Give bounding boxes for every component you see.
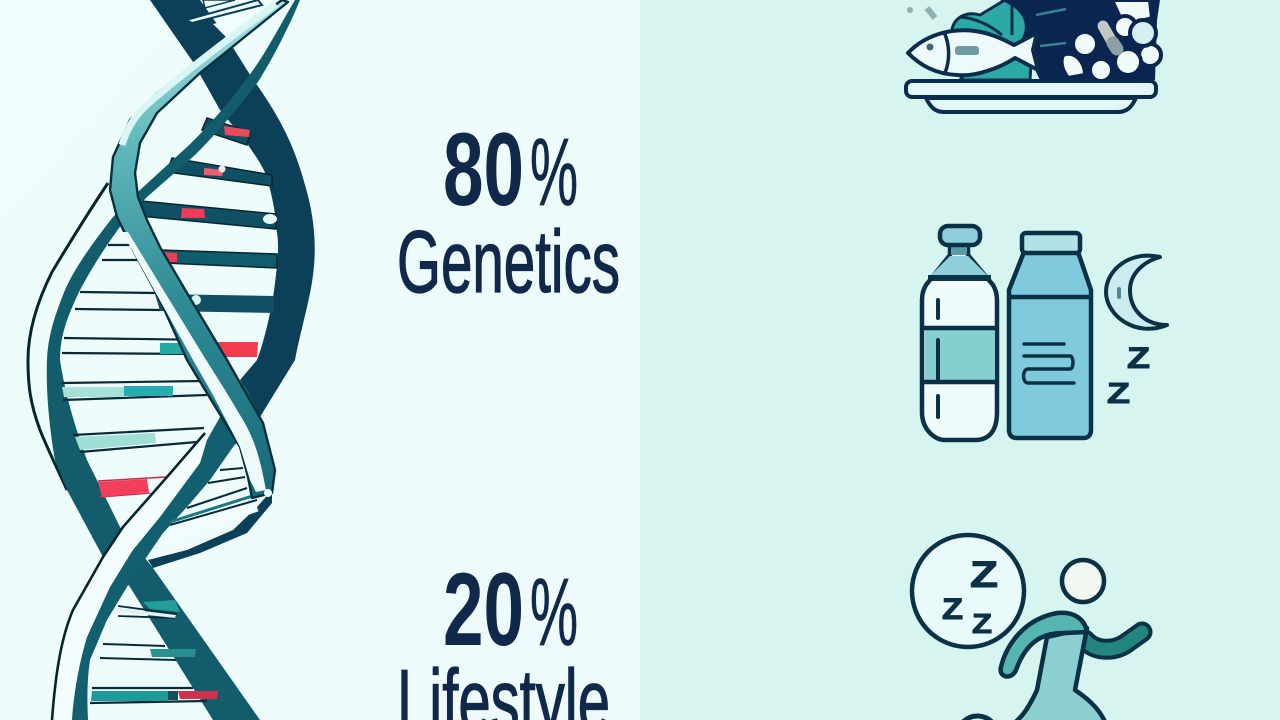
bottle — [922, 226, 997, 440]
icon: sleep bubble and runner — [912, 535, 1142, 720]
stat: 80% Genetics — [397, 112, 620, 311]
strand: front ribbon — [110, 0, 288, 498]
strand: teal left backbone with lower dark run — [47, 0, 300, 720]
label: sleep Z letters — [1107, 342, 1150, 410]
moon — [1106, 256, 1167, 329]
sleep bubble: Z — [970, 554, 998, 595]
rung set: lower — [62, 381, 257, 703]
sleep bubble: Z — [942, 593, 963, 626]
greens — [952, 0, 1035, 80]
sleep bubble — [912, 535, 1024, 647]
rung set: upper — [62, 118, 277, 357]
strand: outer left outline — [28, 183, 108, 490]
runner near arm — [1001, 613, 1087, 676]
sleep bubble: Z — [972, 608, 992, 639]
percent sign: % — [530, 559, 578, 666]
dark leaf — [1000, 0, 1160, 80]
strand: lower teal continuation — [72, 385, 260, 720]
plate — [906, 81, 1156, 97]
panel: genetics background — [0, 0, 640, 720]
runner far arm — [1085, 632, 1142, 649]
stat: 20% Lifestyle — [397, 552, 610, 720]
percent sign: % — [530, 119, 578, 226]
strand: lower white ribbon — [52, 433, 207, 720]
number 20: 20 — [443, 552, 524, 668]
fish — [908, 30, 1038, 75]
strand: dark right backbone — [150, 0, 315, 417]
number 80: 80 — [443, 112, 524, 228]
label Genetics: Genetics — [397, 212, 620, 311]
top rung pieces — [186, 0, 262, 23]
runner torso and legs — [1000, 628, 1108, 720]
carton — [1009, 233, 1091, 438]
label: sleep Z letters: Z — [1127, 342, 1150, 375]
icon: bottle and carton with moon — [922, 226, 1167, 440]
label: sleep Z letters: Z — [1107, 378, 1130, 410]
illustration: DNA double helix — [28, 0, 315, 720]
grape highlights — [1103, 26, 1111, 40]
panel: lifestyle background — [640, 0, 1280, 720]
strand: lower loop — [148, 490, 272, 568]
runner head — [1062, 560, 1104, 602]
grapes — [1062, 0, 1161, 81]
runner rear foot — [963, 716, 992, 720]
ribbon highlights — [122, 4, 276, 145]
icon: plate of fish, greens and grapes — [906, 0, 1161, 112]
